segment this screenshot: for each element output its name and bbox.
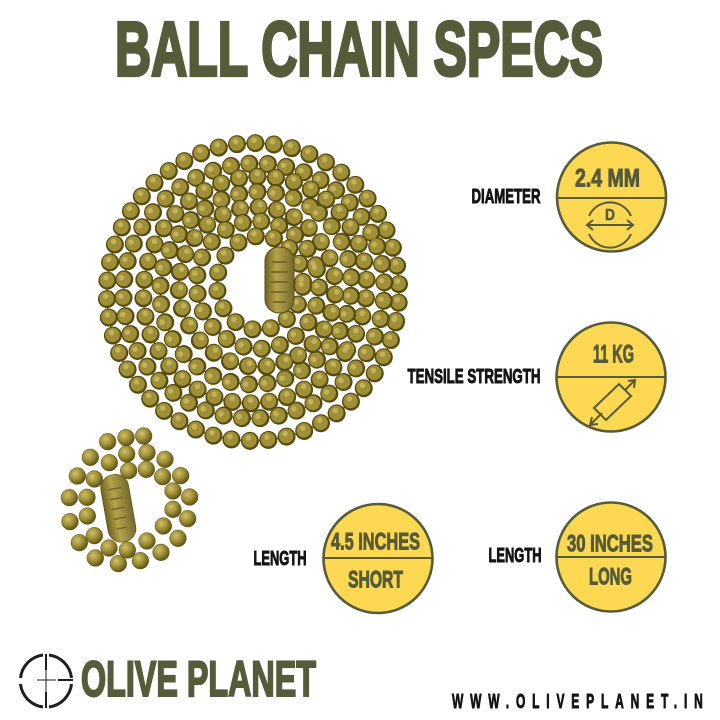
badge: diameter 2.4 mm (557, 142, 666, 252)
badge: 30 inches long (556, 502, 666, 612)
value: 11 kg: 11 KG (593, 340, 634, 368)
value: short: SHORT (348, 566, 403, 594)
value: 2.4 mm: 2.4 MM (575, 164, 640, 192)
label: length short: LENGTH (254, 548, 306, 570)
icon: diameter circle: D (605, 207, 615, 224)
value: 4.5 inches: 4.5 INCHES (331, 528, 420, 556)
label: diameter: DIAMETER (472, 186, 541, 208)
website url: WWW.OLIVEPLANET.IN (452, 691, 703, 713)
icon: tensile stretch (590, 380, 635, 425)
small ball chain coil (61, 428, 198, 572)
label: length long: LENGTH (488, 545, 542, 567)
large chain clasp (265, 247, 294, 313)
small chain clasp (99, 472, 138, 544)
value: 30 inches: 30 INCHES (567, 530, 653, 558)
badge: 4.5 inches short (324, 504, 432, 613)
badge: tensile strength 11 kg (556, 322, 666, 432)
logo wordmark: OLIVE PLANET (81, 651, 316, 707)
value: long: LONG (589, 564, 632, 590)
large ball chain coil (77, 113, 427, 468)
label: tensile strength: TENSILE STRENGTH (408, 366, 540, 388)
logo icon: crosshair (20, 654, 73, 708)
